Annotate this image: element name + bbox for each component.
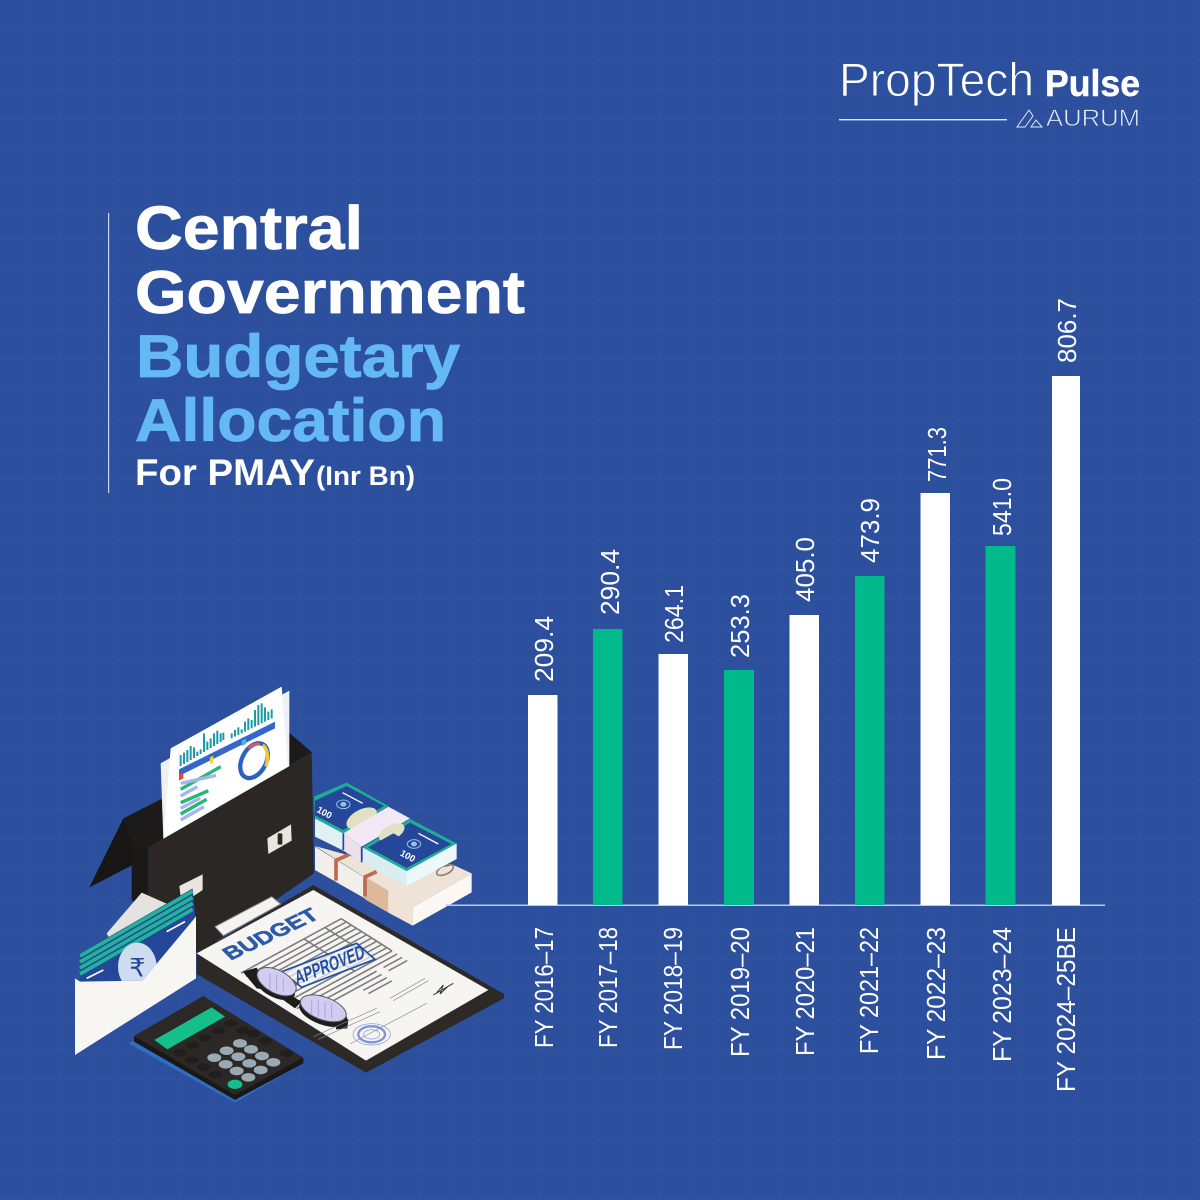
value labels: 290.4 bbox=[595, 549, 625, 615]
axis line bbox=[446, 904, 1105, 906]
approved stamp bbox=[282, 941, 375, 990]
calculator screen bbox=[154, 1007, 225, 1049]
back banknote stack bbox=[314, 783, 388, 851]
briefcase back and lid bbox=[89, 733, 312, 887]
clipboard with budget sheet bbox=[197, 885, 504, 1073]
year labels: FY 2023–24 bbox=[987, 927, 1017, 1062]
bars bbox=[528, 376, 1080, 905]
title block bbox=[108, 194, 525, 493]
value labels: 541.0 bbox=[987, 478, 1017, 536]
clipboard clip bbox=[215, 897, 281, 936]
logo: PropTech Pulse Aurum: Pulse bbox=[1045, 63, 1140, 104]
year labels: FY 2022–23 bbox=[921, 927, 951, 1060]
illustration: budget desk items bbox=[75, 687, 504, 1103]
year labels: FY 2024–25BE bbox=[1051, 927, 1081, 1092]
value labels: 264.1 bbox=[659, 585, 689, 643]
title block: For PMAY bbox=[135, 452, 315, 493]
briefcase body bbox=[132, 753, 314, 954]
back banknote stack: 100 bbox=[315, 805, 334, 821]
year labels: FY 2017–18 bbox=[593, 927, 623, 1048]
year labels: FY 2020–21 bbox=[790, 927, 820, 1056]
briefcase clasps bbox=[179, 824, 292, 897]
approved stamp: APPROVED bbox=[293, 941, 367, 990]
front banknote stack: 100 bbox=[398, 848, 417, 864]
title block: Budgetary bbox=[136, 323, 461, 390]
value labels: 771.3 bbox=[922, 427, 952, 482]
value labels: 405.0 bbox=[790, 537, 820, 602]
glasses bbox=[243, 962, 351, 1033]
signature rule and notes bbox=[313, 978, 428, 1044]
banknotes in envelope: ₹ bbox=[129, 953, 145, 983]
year labels: FY 2016–17 bbox=[529, 927, 559, 1048]
report sheets with charts bbox=[161, 687, 289, 839]
logo: PropTech Pulse Aurum bbox=[839, 53, 1140, 132]
lower banknote stack bbox=[315, 846, 472, 926]
value labels: 209.4 bbox=[529, 616, 559, 682]
logo: PropTech Pulse Aurum: AURUM bbox=[1046, 105, 1140, 132]
calculator bbox=[128, 996, 303, 1103]
value labels bbox=[529, 298, 1082, 682]
banknote wrapper band bbox=[343, 807, 410, 862]
value labels: 473.9 bbox=[855, 498, 885, 563]
title block: Government bbox=[135, 259, 525, 326]
form lines bbox=[241, 919, 417, 1021]
title block: Central bbox=[135, 194, 363, 262]
value labels: 253.3 bbox=[725, 594, 755, 658]
budget heading: BUDGET bbox=[217, 904, 324, 964]
front banknote stack bbox=[363, 819, 457, 886]
calculator dark keys bbox=[173, 1020, 293, 1078]
year labels: FY 2019–20 bbox=[725, 927, 755, 1057]
value labels: 806.7 bbox=[1052, 298, 1082, 363]
year labels: FY 2018–19 bbox=[658, 927, 688, 1050]
envelope with rupee notes bbox=[75, 888, 196, 1055]
signature bbox=[433, 983, 453, 995]
title block: Allocation bbox=[135, 387, 446, 454]
money stacks bbox=[314, 783, 472, 926]
bar chart bbox=[446, 298, 1105, 1092]
seal bbox=[353, 1024, 390, 1045]
calculator keys bbox=[207, 1039, 280, 1089]
year labels bbox=[529, 927, 1081, 1092]
banknotes in envelope bbox=[80, 888, 196, 991]
logo: PropTech Pulse Aurum: PropTech bbox=[839, 53, 1034, 106]
title block: (Inr Bn) bbox=[316, 461, 415, 491]
year labels: FY 2021–22 bbox=[854, 927, 884, 1054]
